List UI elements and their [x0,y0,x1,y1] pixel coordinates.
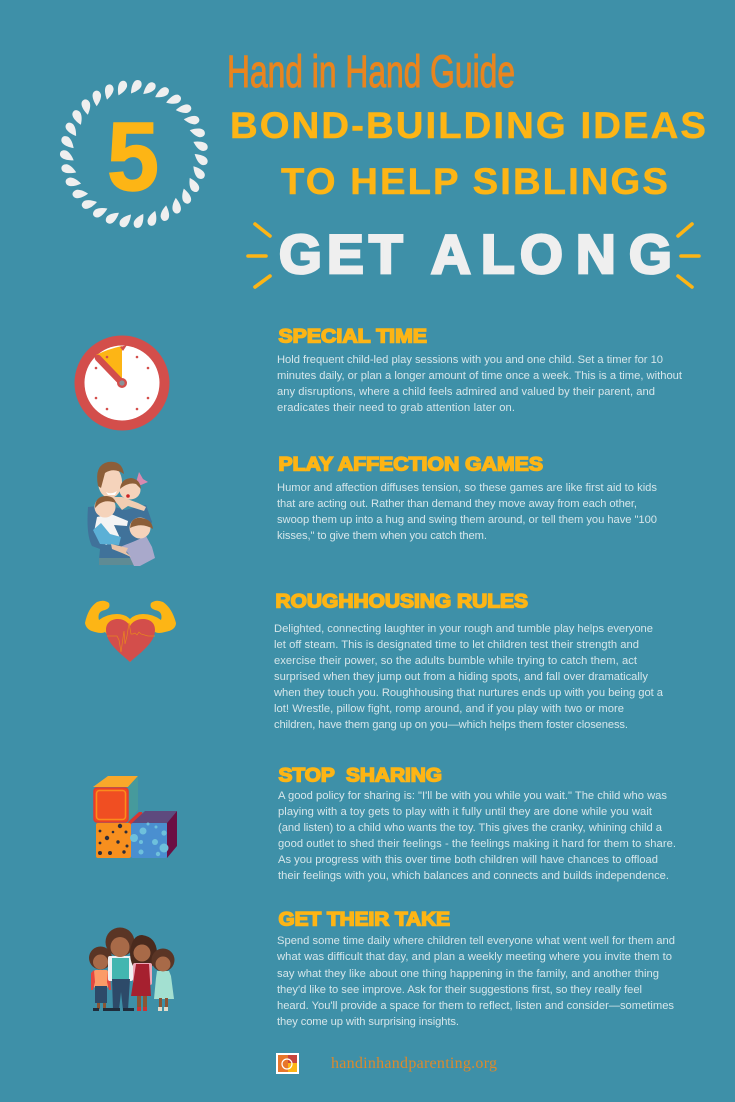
body text: Hold frequent child-led play sessions with you and one child. Set a timer for 10 [277,354,663,366]
body text: (and listen) to a child who wants the toy. This gives the cranky, whining child a [278,822,663,834]
figure: baby [93,496,128,545]
body text: Humor and affection diffuses tension, so these games are like first aid to kids [277,482,657,494]
body text: what was difficult that day, and plan a weekly meeting where you invite them to [276,951,672,963]
body text: Spend some time daily where children tell everyone what went well for them and [277,935,675,947]
figure: girl [152,948,174,1011]
body text [277,354,683,414]
body text: As you progress with this over time both children will have chances to offload [278,854,658,866]
figure: girl with bow [120,472,148,500]
title: Hand in Hand Guide: Hand in Hand Guide [227,46,515,97]
body text [278,790,676,882]
body text: let off steam. This is designated time to let children test their strength and [274,639,639,651]
icon: logo [276,1053,299,1074]
heading: GET THEIR TAKE [278,908,450,930]
icon: right burst lines [678,224,699,287]
icon: father hugging three children [88,462,155,566]
section: play affection games [277,454,657,542]
body text: their feelings with you, which balances and connects and builds independence. [278,870,669,882]
body text [273,623,664,731]
body text: A good policy for sharing is: "I'll be with you while you wait." The child who was [278,790,667,802]
icon: muscular heart [85,601,176,662]
body text: heard. You'll provide a space for them to reflect, listen and consider—sometimes [277,1000,674,1012]
body text: kisses," to give them when you catch them. [277,530,487,542]
body text: say what they like about one thing happening in the family, and another thing [277,968,659,980]
section: get their take [276,908,675,1028]
body text: any disruptions, where a child feels admired and valued by their parent, and [277,386,655,398]
body text: playing with a toy gets to play with it fully until they are done while you wait [278,806,653,818]
body text [276,935,675,1028]
icon: clock [74,336,170,430]
figure: boy [89,946,112,1011]
figure: father [106,928,134,1011]
body text: swoop them up into a hug and swing them around, or tell them you have "100 [277,514,657,526]
body text [277,482,657,542]
icon: teardrop ring with number 5 [60,80,208,228]
icon: toy blocks [93,776,177,858]
body text: lot! Wrestle, pillow fight, romp around, and if you play with two or more [274,703,624,715]
heading: PLAY AFFECTION GAMES [278,454,543,476]
body text: children, have them gang up on you—which helps them foster closeness. [274,719,628,731]
figure: boy [111,518,155,566]
heading: STOP SHARING [278,764,442,786]
icon: left burst lines [248,224,270,287]
heading: ROUGHHOUSING RULES [276,590,528,612]
body text: eradicates their need to grab attention later on. [277,402,515,414]
section: special time [277,326,683,414]
title: To help siblings: TO HELP SIBLINGS [281,161,670,202]
figure: mother [130,935,157,1011]
footer url: handinhandparenting.org [331,1055,497,1072]
icon: family of four [89,928,174,1011]
section: stop sharing [278,764,676,882]
body text: minutes daily, or plan a longer amount of time once a week. This is a time, without [277,370,683,382]
body text: surprised when they jump out from a hiding spots, and fall over dramatically [274,671,648,683]
title: Get along: GET ALONG [0,223,672,285]
section: roughhousing rules [273,590,664,731]
body text: good outlet to shed their feelings - the feelings making it hard for them to share. [278,838,676,850]
figure: father [88,462,152,566]
body text: they'd like to see improve. Ask for their suggestions first, so they really feel [277,984,642,996]
body text: exercise their power, so the adults bumble while trying to catch them, act [274,655,638,667]
icon: teardrop ring with number 5: 5 [107,102,159,211]
body text: they come up with surprising insights. [277,1016,459,1028]
title: Bond-building ideas: BOND-BUILDING IDEAS [230,105,708,146]
body text: Delighted, connecting laughter in your rough and tumble play helps everyone [274,623,653,635]
heading: SPECIAL TIME [278,326,427,348]
body text: when they touch you. Roughhousing that nurtures ends up with you being got a [273,687,664,699]
body text: that are acting out. Rather than demand they move away from each other, [277,498,637,510]
